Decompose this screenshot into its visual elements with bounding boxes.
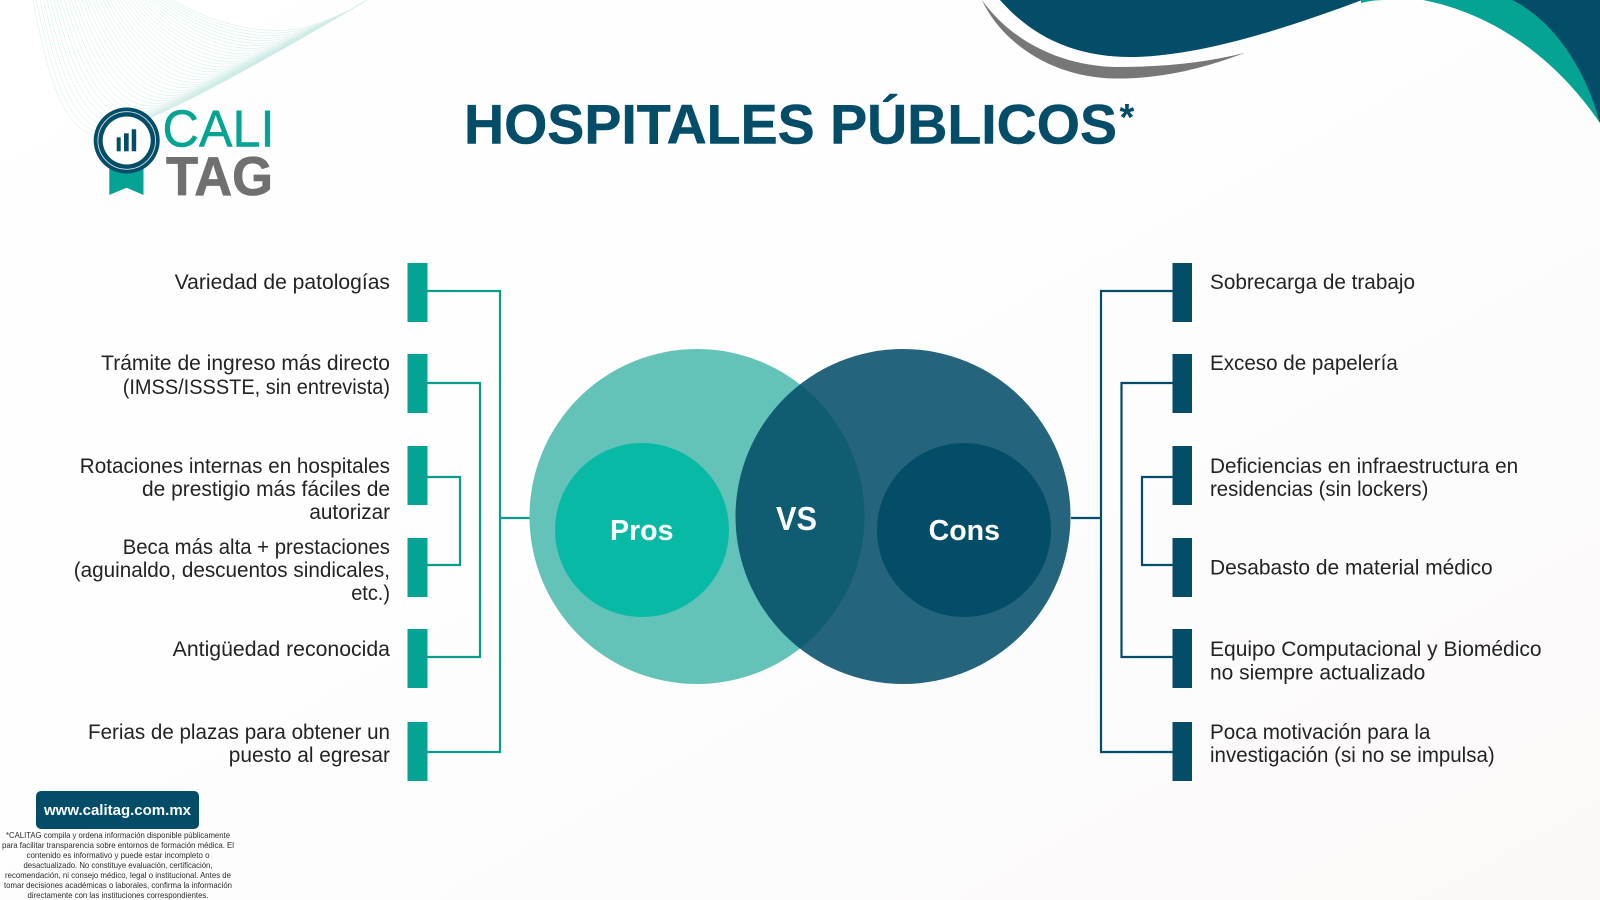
pros bars bbox=[408, 263, 428, 781]
inner circle: cons: Cons bbox=[929, 515, 1000, 547]
disclaimer text: recomendación, ni consejo médico, legal o institucional. Antes de bbox=[5, 870, 231, 880]
cons text items: investigación (si no se impulsa) bbox=[1210, 744, 1495, 767]
disclaimer text: contenido es informativo y puede estar incompleto o bbox=[26, 850, 210, 860]
cons text items: no siempre actualizado bbox=[1210, 662, 1425, 684]
pros text items bbox=[74, 271, 390, 767]
cons connector lines bbox=[1071, 291, 1173, 752]
pros connector lines bbox=[427, 291, 530, 752]
disclaimer text: tomar decisiones académicas o laborales, confirma la información bbox=[4, 880, 232, 890]
pros text items: etc.) bbox=[351, 582, 390, 605]
website button: www.calitag.com.mx bbox=[43, 803, 191, 819]
icon: ribbon bbox=[109, 165, 144, 195]
disclaimer text: para facilitar transparencia sobre entornos de formación médica. El bbox=[2, 840, 234, 850]
disclaimer text: *CALITAG compila y ordena información disponible públicamente bbox=[6, 830, 230, 840]
cons text items bbox=[1210, 271, 1542, 767]
logo: CaliTag bbox=[94, 100, 274, 207]
pros text items: Trámite de ingreso más directo bbox=[101, 352, 390, 375]
pros text items: de prestigio más fáciles de bbox=[142, 478, 390, 501]
label: VS: VS bbox=[776, 500, 817, 537]
title: * bbox=[1120, 97, 1134, 139]
inner circle: pros: Pros bbox=[610, 515, 674, 547]
venn: cons circle bbox=[736, 349, 1070, 684]
cons text items: Sobrecarga de trabajo bbox=[1210, 271, 1415, 294]
logo word: CALI: CALI bbox=[162, 100, 274, 158]
cons text items: Exceso de papelería bbox=[1210, 352, 1398, 375]
cons text items: Deficiencias en infraestructura en bbox=[1210, 455, 1518, 478]
pros text items: Ferias de plazas para obtener un bbox=[88, 721, 390, 744]
disclaimer text bbox=[2, 830, 234, 900]
panel: pros list bbox=[74, 263, 530, 781]
inner circle: cons bbox=[877, 443, 1051, 617]
inner circle: pros bbox=[555, 443, 729, 617]
disclaimer text: desactualizado. No constituye evaluación, certificación, bbox=[24, 860, 212, 870]
pros text items: (aguinaldo, descuentos sindicales, bbox=[74, 559, 390, 582]
cons text items: Poca motivación para la bbox=[1210, 721, 1431, 744]
pros text items: Variedad de patologías bbox=[175, 271, 390, 294]
pros text items: Antigüedad reconocida bbox=[173, 638, 390, 661]
chart: pros vs cons venn diagram bbox=[530, 349, 1070, 684]
pros text items: Beca más alta + prestaciones bbox=[123, 536, 390, 559]
cons bars bbox=[1172, 263, 1192, 781]
panel: cons list bbox=[1071, 263, 1542, 781]
title: HOSPITALES PÚBLICOS bbox=[464, 92, 1117, 156]
logo word: TAG: TAG bbox=[166, 145, 273, 207]
decorative waves top right bbox=[982, 0, 1600, 123]
cons text items: Desabasto de material médico bbox=[1210, 556, 1493, 580]
disclaimer text: directamente con las instituciones correspondientes. bbox=[28, 890, 208, 900]
pros text items: (IMSS/ISSSTE, sin entrevista) bbox=[123, 376, 390, 399]
icon: medal bbox=[94, 108, 160, 174]
decorative wave lines top left bbox=[33, 0, 367, 135]
cons text items: Equipo Computacional y Biomédico bbox=[1210, 638, 1542, 661]
cons text items: residencias (sin lockers) bbox=[1210, 478, 1428, 501]
website button bbox=[36, 791, 199, 829]
pros text items: Rotaciones internas en hospitales bbox=[80, 455, 390, 478]
venn: pros circle bbox=[530, 349, 864, 684]
pros text items: puesto al egresar bbox=[229, 744, 390, 767]
pros text items: autorizar bbox=[309, 501, 390, 524]
